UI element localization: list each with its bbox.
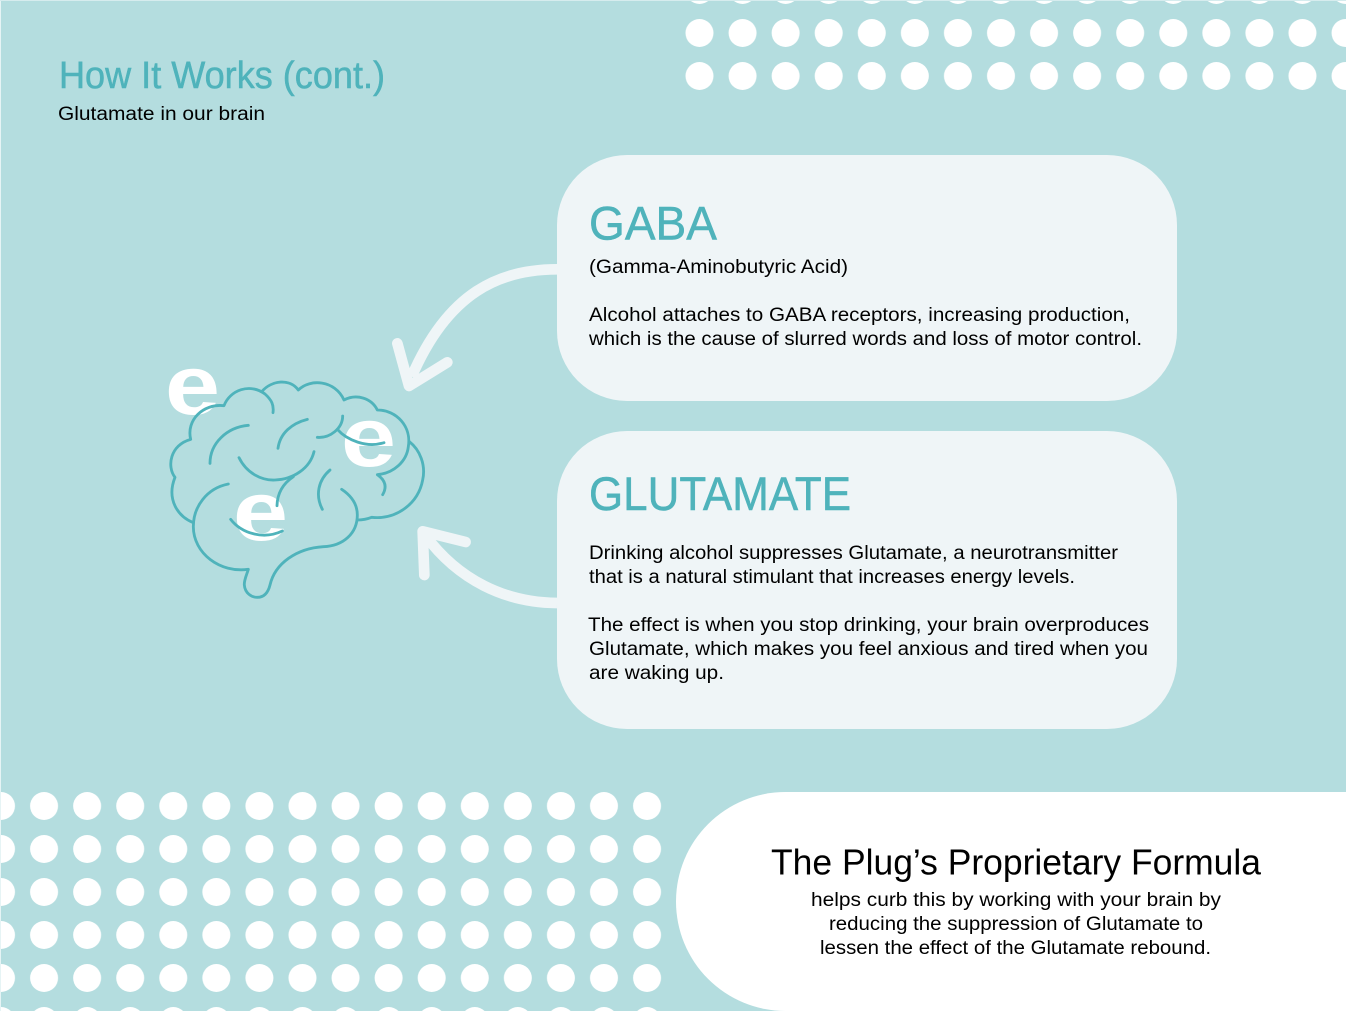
heading: formula: The Plug’s Proprietary Formula bbox=[771, 842, 1262, 882]
heading: Glutamate: GLUTAMATE bbox=[589, 467, 851, 520]
dot pattern: top right bbox=[685, 1, 1346, 91]
text: Glutamate description: Drinking alcohol suppresses Glutamate, a neurotransmitter bbox=[589, 543, 1119, 564]
text: formula description: lessen the effect of the Glutamate rebound. bbox=[820, 938, 1211, 959]
dot pattern: bottom left bbox=[1, 790, 662, 1011]
panel: Glutamate bbox=[557, 431, 1177, 729]
brain outline bbox=[171, 382, 424, 597]
icon: brain with e letters bbox=[165, 338, 424, 597]
text: GABA description: Alcohol attaches to GABA receptors, increasing production, bbox=[589, 305, 1130, 326]
panel: The Plug's Proprietary Formula bbox=[676, 792, 1346, 1011]
text: Glutamate effect: Glutamate, which makes you feel anxious and tired when you bbox=[589, 639, 1148, 660]
text: GABA full name: (Gamma-Aminobutyric Acid) bbox=[589, 257, 848, 278]
arrow: GABA to brain bbox=[397, 269, 557, 386]
panel: GABA bbox=[557, 155, 1177, 401]
heading: GABA: GABA bbox=[589, 196, 718, 250]
text: Glutamate effect: The effect is when you stop drinking, your brain overproduces bbox=[588, 615, 1149, 636]
subtitle: Glutamate in our brain bbox=[58, 104, 265, 125]
letter e: upper right: e bbox=[341, 390, 396, 484]
text: Glutamate effect bbox=[588, 615, 1149, 684]
text: GABA description bbox=[588, 305, 1142, 350]
text: GABA description: which is the cause of slurred words and loss of motor control. bbox=[588, 329, 1142, 350]
text: Glutamate description: that is a natural stimulant that increases energy levels. bbox=[589, 567, 1075, 588]
text: Glutamate description bbox=[589, 543, 1119, 588]
arrow: Glutamate to brain bbox=[423, 531, 557, 603]
title: How It Works (cont.) bbox=[59, 55, 385, 97]
letter e: lower: e bbox=[233, 464, 288, 558]
text: formula description: helps curb this by working with your brain by bbox=[811, 890, 1222, 911]
letter e: upper left: e bbox=[165, 338, 220, 432]
text: Glutamate effect: are waking up. bbox=[589, 663, 724, 684]
text: formula description: reducing the suppression of Glutamate to bbox=[829, 914, 1203, 935]
text: formula description bbox=[811, 890, 1222, 959]
